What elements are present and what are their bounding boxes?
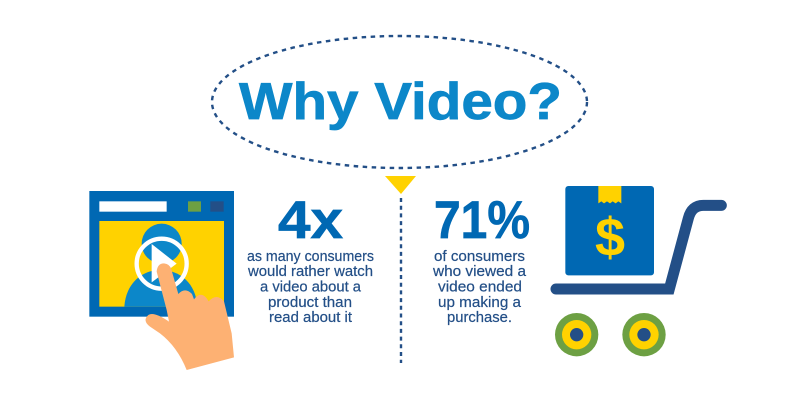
dollar sign: $ <box>595 208 625 268</box>
pointer triangle <box>385 176 416 194</box>
text block: 71% description: of consumers <box>434 249 525 265</box>
icon: video browser window with hand <box>89 191 234 370</box>
text block: 4x description: read about it <box>269 310 352 326</box>
text block: 4x description: product than <box>268 295 352 311</box>
text block: 4x description: a video about a <box>260 280 362 296</box>
text block: 71% description: who viewed a <box>432 264 527 280</box>
text block: 4x description: would rather watch <box>247 264 373 280</box>
text block: 71% description: video ended <box>438 280 522 296</box>
stat: 71%: 71% <box>434 191 530 250</box>
icon: shopping cart with dollar box <box>555 186 721 356</box>
center divider: dotted line <box>400 198 402 363</box>
text block: 71% description: purchase. <box>447 310 512 326</box>
title: Why Video? <box>239 73 562 131</box>
stat: 4x: 4x <box>278 191 344 250</box>
text block: 71% description <box>432 249 527 326</box>
text block: 71% description: up making a <box>438 295 522 311</box>
title bubble: dashed ellipse <box>212 36 587 168</box>
text block: 4x description <box>247 249 374 326</box>
text block: 4x description: as many consumers <box>247 249 374 265</box>
